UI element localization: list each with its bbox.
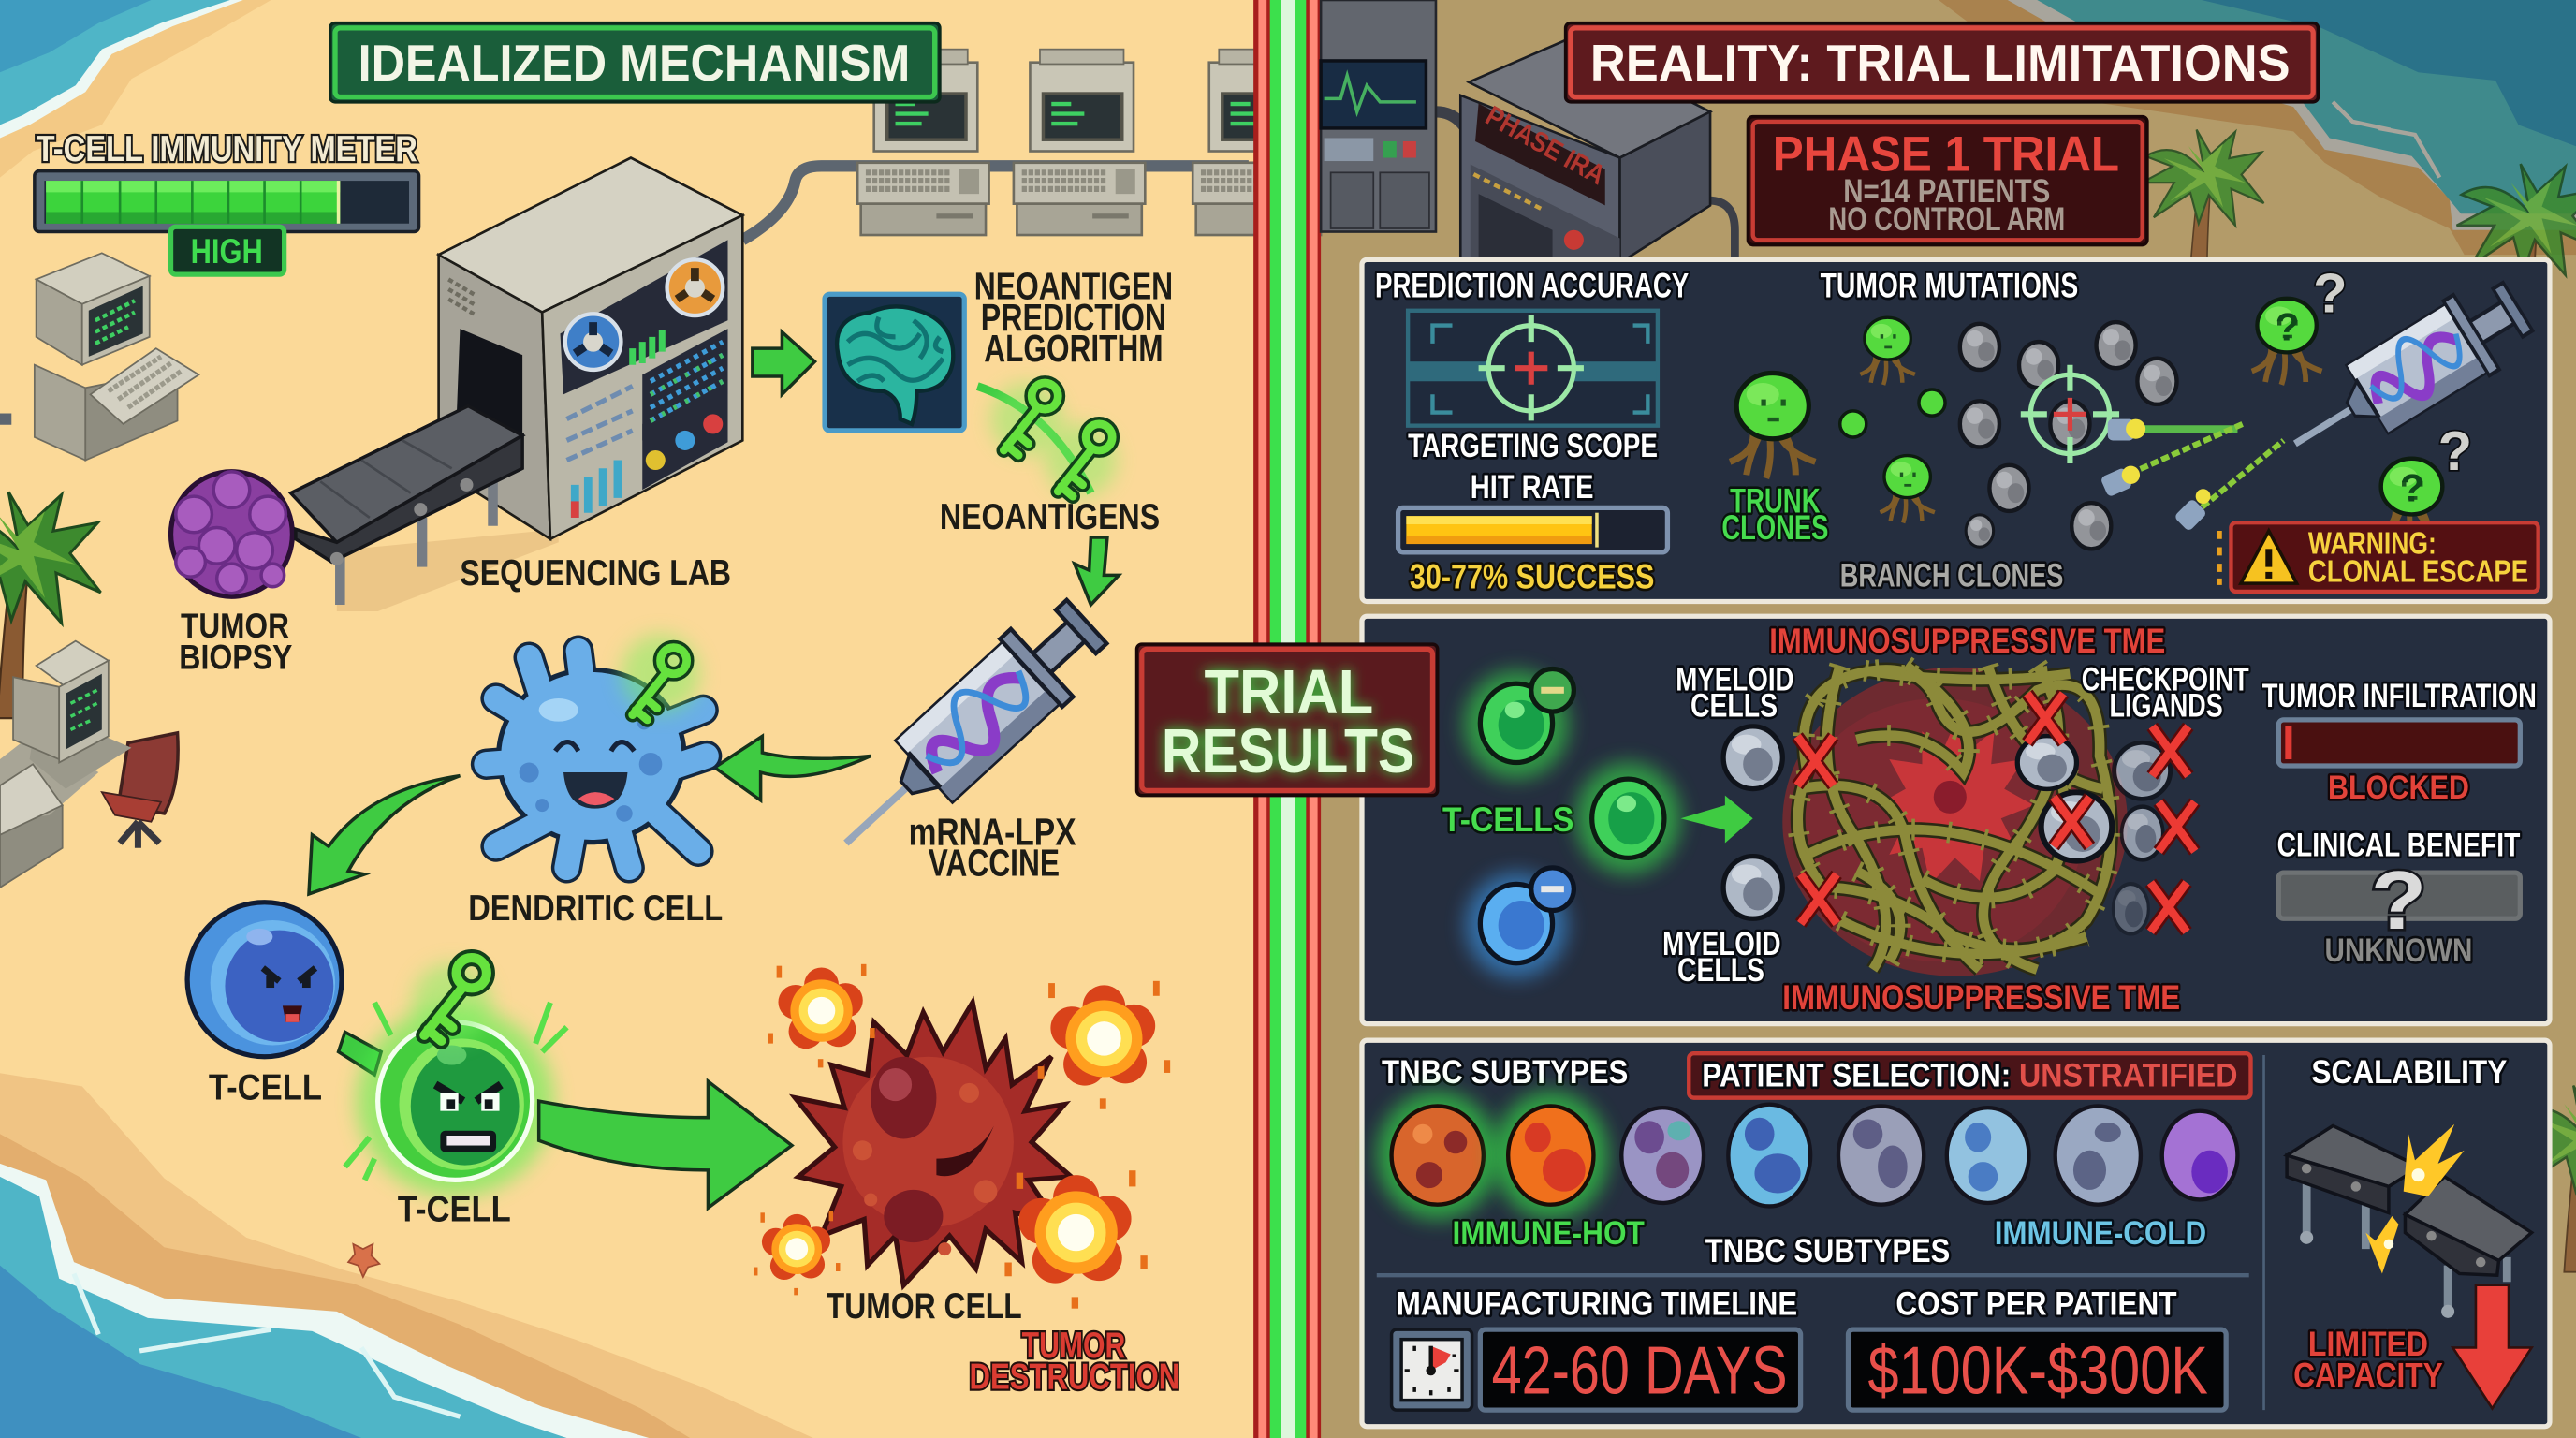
icon: palm tree upper right 1	[2142, 130, 2263, 295]
callout: trial results	[1137, 644, 1438, 796]
algorithm label: PREDICTION	[981, 296, 1166, 339]
arrow: neoantigens to vaccine	[1075, 537, 1119, 605]
arrow: dendritic to T-cell	[309, 776, 460, 894]
callout: clonal escape warning: CLONAL ESCAPE	[2308, 554, 2528, 589]
meter level badge: HIGH	[191, 232, 263, 271]
upper display panel	[560, 240, 728, 394]
arrow: algorithm to neoantigens	[977, 387, 1090, 493]
arrow: T-cell activation	[339, 1032, 381, 1075]
meter label: T-CELL IMMUNITY METER	[37, 129, 417, 169]
dendritic label: DENDRITIC CELL	[468, 888, 723, 929]
myeloid cells label bottom	[1662, 926, 1781, 989]
icon: retro computer top 1	[857, 50, 989, 235]
icon: tumor in thorn tangle	[1782, 666, 2128, 976]
success label: 30-77% SUCCESS	[1410, 557, 1654, 595]
tumor infiltration bar	[2278, 720, 2520, 766]
clinical benefit bar	[2278, 855, 2520, 946]
icon: explosion bottom right	[1004, 1170, 1148, 1309]
neoantigens label: NEOANTIGENS	[940, 497, 1160, 537]
arrow: T-cell to TME	[1680, 796, 1753, 844]
trunk clones label: TRUNK	[1730, 482, 1821, 521]
myeloid cells label top	[1676, 661, 1794, 724]
callout: trial results: RESULTS	[1162, 717, 1414, 786]
stat: cost display: $100K-$300K	[1868, 1334, 2208, 1409]
icon: broken conveyor	[2287, 1124, 2532, 1318]
icon: mRNA-LPX vaccine syringe	[815, 588, 1118, 877]
immune-cold label: IMMUNE-COLD	[1995, 1215, 2206, 1252]
icon: explosion bottom left	[754, 1211, 840, 1295]
icon: retro computer isometric left	[35, 253, 198, 461]
algorithm label	[974, 264, 1173, 370]
subtype 7	[2056, 1106, 2141, 1205]
tumor destruction label: TUMOR	[1022, 1326, 1125, 1366]
checkpoint ligands label: LIGANDS	[2110, 687, 2223, 724]
title: reality trial limitations	[1566, 23, 2318, 102]
tumor biopsy	[171, 472, 292, 676]
T-cell label 1: T-CELL	[209, 1067, 322, 1108]
callout: trial results: TRIAL	[1204, 658, 1373, 727]
callout: trial results: TRIAL	[1204, 658, 1373, 727]
T-cells label: T-CELLS	[1442, 800, 1573, 839]
subtype 5	[1838, 1106, 1924, 1205]
callout: phase 1 trial: N=14 PATIENTS	[1843, 173, 2050, 210]
trunk clone	[1730, 373, 1815, 478]
icon: unknown clone top: ?	[2276, 304, 2300, 348]
cost per patient label: COST PER PATIENT	[1895, 1285, 2177, 1322]
heading: scalability: SCALABILITY	[2311, 1054, 2507, 1091]
callout: patient selection: PATIENT SELECTION:	[1702, 1057, 2011, 1093]
clinical benefit label: CLINICAL BENEFIT	[2277, 828, 2521, 864]
cables between computers	[0, 166, 1249, 419]
icon: unknown clone top: ?	[2313, 262, 2348, 325]
subtype 6	[1947, 1108, 2029, 1203]
icon: panel syringe	[2272, 270, 2540, 481]
biopsy label	[179, 607, 292, 676]
title: reality trial limitations: REALITY: TRIAL LIMITATIONS	[1590, 35, 2291, 92]
trunk clones label: CLONES	[1721, 508, 1828, 547]
icon: myeloid cell top	[1723, 726, 1782, 789]
icon: exhausted green T-cell	[1464, 668, 1573, 779]
callout: clonal escape warning: WARNING:	[2308, 527, 2437, 562]
scanner opening	[457, 329, 522, 440]
subtype 4	[1728, 1105, 1810, 1206]
icon: tumor cell	[795, 1003, 1071, 1285]
center divider	[1253, 0, 1321, 1438]
checkpoint ligands label	[2082, 661, 2249, 724]
callout: patient selection: UNSTRATIFIED	[2019, 1057, 2237, 1093]
TNBC subtypes center label: TNBC SUBTYPES	[1705, 1233, 1950, 1269]
icon: explosion top right	[1038, 981, 1170, 1109]
panel: patient selection, manufacturing, scalability	[1362, 1040, 2550, 1427]
icon: dendritic cell	[487, 651, 707, 868]
clinical benefit bar: ?	[2371, 855, 2426, 946]
T-cell label 2: T-CELL	[398, 1189, 511, 1229]
stat: manufacturing days display: 42-60 DAYS	[1492, 1334, 1788, 1409]
icon: small clones	[1840, 317, 1945, 523]
title: idealized mechanism: IDEALIZED MECHANISM	[359, 35, 910, 92]
icon: green T-cell	[1575, 763, 1680, 874]
icon: key on activated T-cell	[413, 958, 491, 1042]
arrow: T-cell attacks tumor	[539, 1081, 792, 1208]
heading: prediction accuracy: PREDICTION ACCURACY	[1375, 267, 1689, 305]
icon: retro computer with chair lower left	[0, 641, 178, 888]
heading: TNBC subtypes: TNBC SUBTYPES	[1382, 1054, 1628, 1091]
conveyor belt	[291, 406, 522, 605]
icon: myeloid cell bottom	[1723, 857, 1782, 918]
heading: tumor mutations: TUMOR MUTATIONS	[1821, 267, 2078, 305]
T-cell immunity meter	[35, 129, 419, 274]
limited capacity label: CAPACITY	[2293, 1357, 2443, 1395]
arrow: decline	[2452, 1285, 2532, 1408]
icons: blocked X marks	[1797, 694, 2195, 932]
subtype 1 hot	[1377, 1092, 1499, 1220]
blocked label: BLOCKED	[2328, 770, 2469, 806]
icon: LNP shots	[2100, 419, 2284, 532]
icon: unknown clone top	[2252, 262, 2348, 385]
icon: palm tree lower right	[2511, 1086, 2576, 1272]
tumor destruction label	[970, 1326, 1179, 1397]
panel: beach background left	[0, 0, 1257, 1438]
heading: immunosuppressive TME bottom: IMMUNOSUPPRESSIVE TME	[1782, 978, 2180, 1017]
panel: prediction accuracy and clonal escape	[1362, 259, 2550, 601]
icon: exhausted blue T-cell	[1466, 868, 1573, 977]
meter bar	[35, 171, 419, 232]
sparks	[2404, 1124, 2465, 1196]
icon: unknown clone bottom: ?	[2438, 419, 2472, 482]
icon: crosshair on clone	[2021, 365, 2119, 463]
subtype 3	[1621, 1108, 1704, 1203]
icon: neoantigen key 2	[1045, 424, 1117, 496]
vaccine label	[909, 810, 1076, 885]
title: idealized mechanism	[330, 23, 940, 102]
icon: unknown clone bottom	[2376, 419, 2472, 548]
tumor cell label: TUMOR CELL	[827, 1286, 1022, 1327]
icon: activated green T-cell	[345, 1003, 567, 1196]
manufacturing timeline label: MANUFACTURING TIMELINE	[1397, 1285, 1797, 1322]
meter level badge	[171, 227, 285, 274]
algorithm label: NEOANTIGEN	[974, 264, 1173, 307]
subtype 8	[2162, 1111, 2237, 1199]
limited capacity label: LIMITED	[2308, 1325, 2428, 1363]
limited capacity label	[2293, 1325, 2443, 1395]
vitals screen	[1321, 61, 1426, 128]
heading: immunosuppressive TME top: IMMUNOSUPPRESSIVE TME	[1769, 622, 2165, 660]
lower display panels	[567, 329, 728, 518]
callout: trial results: RESULTS	[1162, 717, 1414, 786]
algorithm label: ALGORITHM	[984, 327, 1164, 370]
myeloid cells label top: MYELOID	[1676, 661, 1794, 697]
icon: brain algorithm	[825, 294, 964, 431]
vaccine label: mRNA-LPX	[909, 810, 1076, 853]
icons: TNBC subtype cells	[1377, 1092, 2237, 1220]
icon: retro computer top 2	[1014, 50, 1145, 235]
sequencing lab machine	[291, 158, 742, 611]
immune-hot label: IMMUNE-HOT	[1453, 1215, 1645, 1252]
icon: palm tree upper right 2	[2457, 164, 2576, 356]
sequencing lab label: SEQUENCING LAB	[460, 553, 731, 594]
machine left face	[439, 255, 550, 539]
machine top face	[439, 158, 742, 313]
myeloid cells label bottom: CELLS	[1677, 952, 1764, 989]
icon: explosion top left	[768, 964, 875, 1067]
unknown label: UNKNOWN	[2324, 932, 2472, 969]
checkpoint ligands label: CHECKPOINT	[2082, 661, 2249, 697]
icon: unknown clone bottom: ?	[2400, 465, 2424, 509]
icon: neoantigen key 1	[990, 383, 1063, 455]
vaccine label: VACCINE	[929, 842, 1060, 885]
targeting scope	[1408, 311, 1658, 426]
biopsy label: BIOPSY	[179, 638, 292, 676]
arrow: vaccine to dendritic cell	[714, 736, 871, 800]
icon: naive blue T-cell	[187, 902, 342, 1057]
myeloid cells label top: CELLS	[1690, 687, 1778, 724]
icon: antigen key on dendritic cell	[621, 635, 700, 720]
right machine: phase 1 sequencer: PHASE IRA	[1480, 100, 1610, 191]
icon: branch clone rocks	[1960, 322, 2177, 549]
targeting scope label: TARGETING SCOPE	[1408, 428, 1658, 464]
icon: retro computer top 3	[1193, 50, 1325, 235]
icon: palm tree lower left	[0, 492, 101, 718]
callout: phase 1 trial: PHASE 1 TRIAL	[1773, 127, 2119, 183]
tumor destruction label: DESTRUCTION	[970, 1357, 1179, 1397]
callout: clonal escape warning	[2219, 522, 2539, 592]
callout: patient selection	[1689, 1053, 2250, 1098]
subtype 2 hot	[1493, 1092, 1608, 1220]
right machine: phase 1 sequencer	[1460, 39, 1734, 263]
callout: phase 1 trial: NO CONTROL ARM	[1828, 201, 2065, 238]
icon: checkpoint ligand cells	[2017, 736, 2171, 933]
panel: tumor microenvironment	[1362, 616, 2550, 1024]
vent	[448, 279, 476, 315]
icon: purple tumor cluster	[171, 472, 292, 596]
branch clones label: BRANCH CLONES	[1840, 558, 2063, 594]
hit rate bar	[1398, 507, 1667, 552]
arrow: lab to algorithm	[753, 332, 815, 394]
icon: clock	[1392, 1329, 1472, 1410]
trunk clones label	[1721, 482, 1828, 547]
panel: beach background right	[1314, 0, 2576, 1438]
right machine: monitor unit	[1321, 0, 1466, 232]
hit rate label: HIT RATE	[1471, 469, 1593, 506]
myeloid cells label bottom: MYELOID	[1662, 926, 1781, 962]
machine front face	[542, 215, 742, 539]
biopsy label: TUMOR	[181, 607, 289, 645]
callout: phase 1 trial	[1748, 117, 2147, 245]
